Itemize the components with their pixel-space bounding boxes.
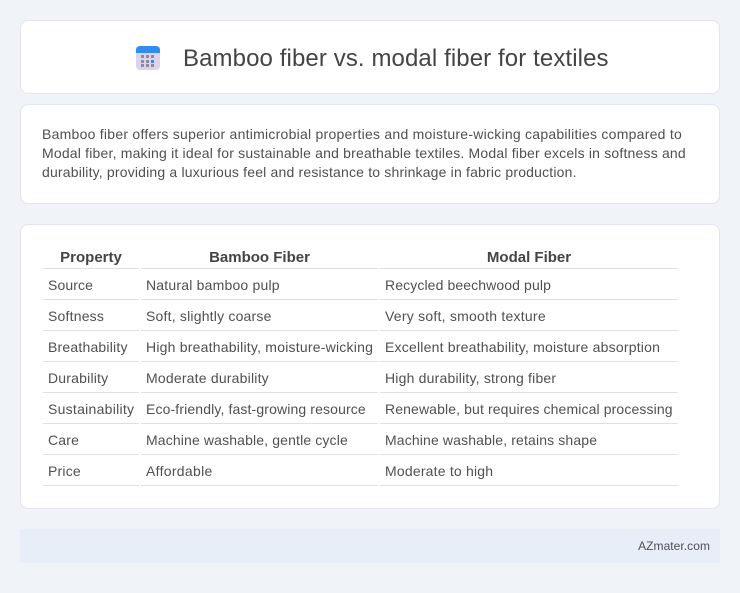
comparison table — [43, 249, 678, 486]
row: softness: Soft, slightly coarse — [146, 308, 272, 324]
summary text — [42, 126, 686, 180]
row: sustainability: Eco-friendly, fast-growing resource — [146, 401, 366, 417]
row: source: Natural bamboo pulp — [146, 277, 280, 293]
row: price: Price — [48, 463, 81, 479]
row: durability: Durability — [48, 370, 108, 386]
row: source: Source — [48, 277, 93, 293]
title: Bamboo fiber vs. modal fiber for textiles — [183, 45, 609, 72]
row: softness: Very soft, smooth texture — [385, 308, 546, 324]
row: softness: Softness — [48, 308, 104, 324]
row: source: Recycled beechwood pulp — [385, 277, 551, 293]
row: durability: High durability, strong fiber — [385, 370, 556, 386]
table header: Property — [60, 249, 122, 266]
row: durability: Moderate durability — [146, 370, 269, 386]
row: breathability — [43, 339, 678, 362]
row: sustainability — [43, 401, 678, 424]
row: care — [43, 432, 678, 455]
row: source — [43, 277, 678, 300]
row: softness — [43, 308, 678, 331]
icon: calendar — [136, 46, 160, 70]
table header: Modal Fiber — [487, 249, 571, 266]
row: breathability: Breathability — [48, 339, 128, 355]
row: sustainability: Sustainability — [48, 401, 134, 417]
row: price: Moderate to high — [385, 463, 493, 479]
title card — [20, 20, 720, 94]
row: price — [43, 463, 678, 486]
row: breathability: High breathability, moisture-wicking — [146, 339, 373, 355]
row: price: Affordable — [146, 463, 213, 479]
summary text: durability, providing a luxurious feel and resistance to shrinkage in fabric production. — [42, 164, 577, 180]
summary text: Bamboo fiber offers superior antimicrobial properties and moisture-wicking capabilities compared to — [42, 126, 682, 142]
row: care: Machine washable, gentle cycle — [146, 432, 348, 448]
row: sustainability: Renewable, but requires chemical processing — [385, 401, 673, 417]
summary card — [20, 104, 720, 204]
table header: Bamboo Fiber — [209, 249, 310, 266]
row: care: Care — [48, 432, 79, 448]
row: breathability: Excellent breathability, moisture absorption — [385, 339, 660, 355]
row: care: Machine washable, retains shape — [385, 432, 597, 448]
summary text: Modal fiber, making it ideal for sustainable and breathable textiles. Modal fiber excels in softness and — [42, 145, 686, 161]
row: durability — [43, 370, 678, 393]
table header — [43, 249, 678, 269]
footer bar — [20, 529, 720, 563]
table card — [20, 224, 720, 509]
footer text: AZmater.com — [638, 539, 710, 553]
